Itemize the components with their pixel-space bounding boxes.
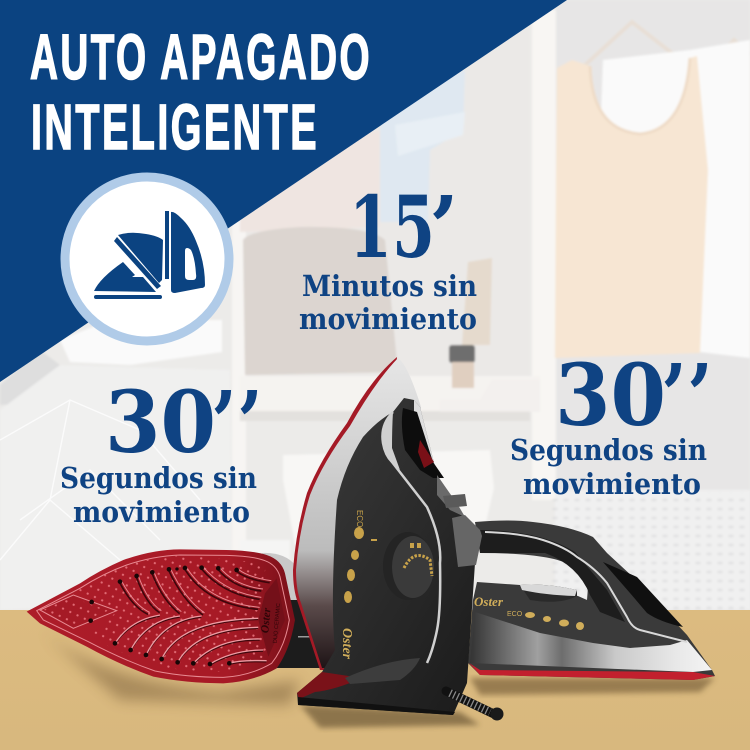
wooden table — [0, 610, 750, 750]
callout: 30 seconds right: ’’ — [661, 346, 713, 446]
callout: 30 seconds left: Segundos sin — [60, 461, 257, 495]
blue corner triangle — [0, 0, 567, 382]
callout: 30 seconds right — [510, 346, 713, 501]
red soleplate iron — [27, 549, 322, 705]
hangers — [560, 22, 750, 88]
callout: 30 seconds left — [60, 373, 263, 529]
callout: 15 minutes — [299, 178, 477, 336]
ottoman — [555, 490, 750, 610]
gold control icons: ECO — [355, 510, 364, 527]
callout: 30 seconds left: 30 — [105, 373, 216, 473]
iron lying flat, right: Oster — [474, 594, 504, 609]
peach tank top — [555, 56, 708, 358]
gold control icons: Oster — [339, 628, 354, 660]
gold control icons — [339, 510, 377, 660]
red soleplate iron: Oster — [259, 607, 274, 634]
callout: 15 minutes: Minutos sin — [302, 269, 477, 303]
callout: 15 minutes: ’ — [429, 178, 459, 278]
callout: 30 seconds left: movimiento — [73, 495, 250, 529]
white shirt behind — [600, 40, 750, 358]
callout: 30 seconds right: 30 — [555, 346, 666, 446]
icon: iron in circle — [65, 177, 229, 341]
iron standing upright — [293, 357, 482, 728]
title: INTELIGENTE — [31, 91, 319, 163]
callout: 30 seconds right: Segundos sin — [510, 433, 707, 467]
dial — [383, 532, 434, 600]
callout: 30 seconds right: movimiento — [523, 467, 701, 501]
red soleplate iron: DUO CERAMIC — [273, 603, 282, 643]
iron lying flat, right: ECO — [507, 611, 523, 618]
callout: 30 seconds left: ’’ — [211, 373, 263, 473]
callout: 15 minutes: 15 — [349, 178, 435, 278]
iron lying flat, right — [468, 520, 715, 695]
callout: 15 minutes: movimiento — [299, 302, 477, 336]
title — [30, 21, 372, 163]
title: AUTO APAGADO — [30, 21, 372, 93]
power cord — [446, 691, 504, 720]
